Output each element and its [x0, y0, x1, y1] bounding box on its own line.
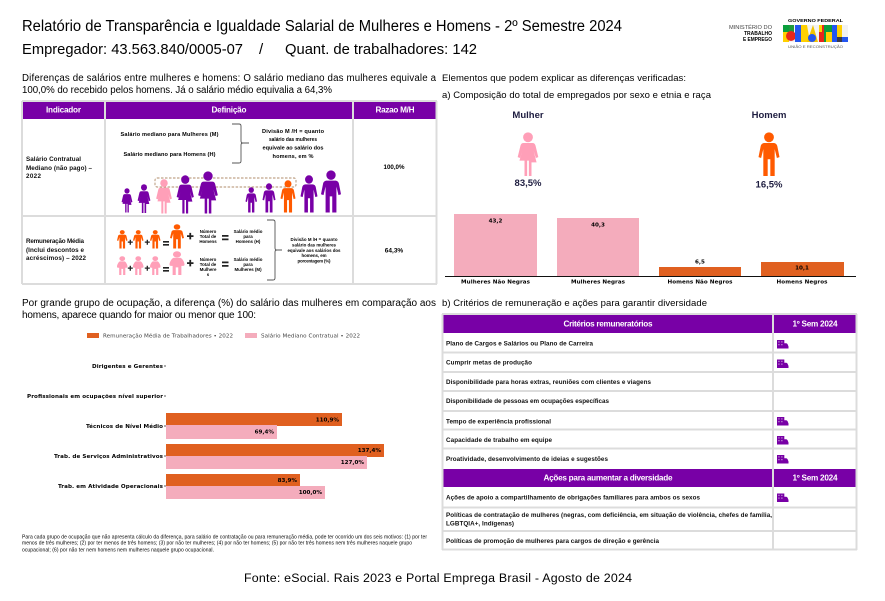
criteria rows: Disponibilidade de pessoas em ocupações específicas — [446, 398, 609, 405]
icons: criteria met — [777, 340, 788, 502]
logo: Ministério do Trabalho e Emprego — [729, 24, 772, 43]
header: diversity actions — [443, 469, 856, 487]
header: remuneration criteria — [443, 315, 856, 333]
employer line: / — [259, 41, 264, 58]
row 1 indicator: Salário Contratual — [26, 156, 81, 163]
chart: composition by sex and race: Mulheres Negras — [571, 280, 626, 286]
occupation intro text: Por grande grupo de ocupação, a diferença (%) do salário das mulheres em comparação aos — [22, 298, 436, 309]
row 2 division note: porcentagem (%) — [298, 258, 331, 264]
chart: composition by sex and race: 10,1 — [795, 266, 809, 272]
row 1 indicator — [26, 156, 92, 180]
table header: Razao M/H — [376, 106, 415, 114]
bars: Trab. de Serviços Administrativos — [166, 444, 384, 469]
criteria rows — [446, 340, 651, 463]
panel: indicators table — [22, 101, 437, 284]
category labels: Dirigentes e Gerentes — [92, 364, 164, 370]
chart: composition by sex and race: 43,2 — [489, 218, 503, 224]
panel: woman share: 83,5% — [515, 178, 542, 189]
header: diversity actions: 1º Sem 2024 — [792, 474, 838, 482]
header: diversity actions: Ações para aumentar a diversidade — [544, 474, 673, 482]
criteria rows: Disponibilidade para horas extras, reuniões com clientes e viagens — [446, 379, 651, 386]
footnote: menos de três mulheres; (2) por ter menos de três homens; (3) por não ter mulheres; (4) por não ter homens; (5) por não ter três homens nem três mulheres naquele grupo — [22, 540, 412, 546]
bars: Técnicos de Nível Médio: 110,9% — [316, 418, 339, 424]
icons: men group — [246, 170, 341, 212]
logo: Governo Federal Brasil: GOVERNO FEDERAL — [788, 18, 843, 24]
table header — [23, 102, 436, 119]
formula: women: Número — [200, 257, 217, 262]
footnote: ocupacional; (6) por não ter nem homens nem mulheres naquele grupo ocupacional. — [22, 548, 214, 554]
row 2 division note: equivale aos salários dos — [288, 248, 341, 253]
bars: Trab. em Atividade Operacionais: 83,9% — [278, 478, 297, 484]
row 1 ratio: 100,0% — [384, 164, 405, 171]
formula: men: Total de — [200, 234, 217, 239]
row 2 indicator: acréscimos) – 2022 — [26, 255, 86, 262]
chart: composition by sex and race — [445, 214, 856, 286]
panel: woman share — [512, 110, 544, 189]
row 2 indicator: Remuneração Média — [26, 238, 84, 245]
employer line: Empregador: 43.563.840/0005-07 — [22, 41, 243, 58]
bars: Trab. de Serviços Administrativos: 127,0% — [341, 460, 364, 466]
title: Relatório de Transparência e Igualdade Salarial de Mulheres e Homens - 2º Semestre 2024 — [22, 18, 622, 35]
intro text: salary differences: Diferenças de salários entre mulheres e homens: O salário mediano das mulheres equivale a — [22, 73, 437, 84]
formula: men — [117, 224, 263, 248]
intro text: salary differences: 100,0% do recebido pelos homens. Já o salário médio equivalia a 64,3% — [22, 85, 332, 96]
dashed highlight box — [155, 178, 296, 187]
criteria rows: Cumprir metas de produção — [446, 360, 532, 366]
panel: criteria table — [442, 314, 857, 550]
criteria rows: Proatividade, desenvolvimento de ideias e sugestões — [446, 456, 608, 463]
formula: women: Mulheres (M) — [234, 267, 262, 272]
criteria rows: Plano de Cargos e Salários ou Plano de Carreira — [446, 340, 593, 348]
category labels: Trab. de Serviços Administrativos — [54, 454, 164, 460]
formula: men: Número — [200, 229, 217, 234]
category labels: Profissionais em ocupações nível superior — [27, 393, 163, 400]
row 1 brace — [232, 124, 249, 163]
row 1 indicator: 2022 — [26, 173, 41, 180]
bars: Técnicos de Nível Médio: 69,4% — [255, 430, 274, 436]
panel: man share — [752, 110, 786, 190]
bars: Trab. de Serviços Administrativos: 137,4% — [358, 448, 381, 454]
category labels: Trab. em Atividade Operacionais — [58, 484, 164, 490]
section a heading: a) Composição do total de empregados por sexo e etnia e raça — [442, 90, 712, 101]
row 2 division note — [288, 237, 341, 264]
formula: women: Total de — [200, 262, 217, 267]
action rows — [446, 494, 772, 545]
chart: composition by sex and race: Homens Não Negros — [668, 280, 733, 286]
formula: men: para — [243, 234, 253, 239]
formula: men: Salário médio — [234, 229, 263, 234]
row 1 division note — [262, 129, 325, 160]
header: remuneration criteria: Critérios remuneratórios — [564, 320, 653, 328]
bars: Trab. em Atividade Operacionais — [166, 474, 325, 499]
row 2 division note: homens, em — [302, 253, 327, 258]
row 2 division note: salário das mulheres — [292, 242, 337, 248]
chart: composition by sex and race: Homens Negros — [776, 280, 828, 286]
logo: Governo Federal Brasil: UNIÃO E RECONSTRUÇÃO — [788, 44, 843, 49]
formula: men: Homens (H) — [236, 239, 261, 244]
legend — [87, 332, 360, 340]
action rows: LGBTQIA+, Indígenas) — [446, 520, 514, 528]
footnote — [22, 534, 427, 554]
formula: women: para — [243, 262, 253, 267]
criteria rows: Capacidade de trabalho em equipe — [446, 437, 552, 444]
row 1 division note: homens, em % — [272, 154, 314, 160]
logo: Ministério do Trabalho e Emprego: TRABALHO — [744, 31, 772, 37]
panel: man share: Homem — [752, 110, 786, 121]
occupation intro text: homens, aparece quando for maior ou menor que 100: — [22, 310, 256, 321]
criteria rows: Tempo de experiência profissional — [446, 418, 551, 426]
row 1 labels — [120, 132, 219, 158]
chart: composition by sex and race: 6,5 — [695, 260, 705, 266]
action rows: Políticas de contratação de mulheres (negras, com deficiência, em situação de violência, chefes de família, — [446, 512, 772, 519]
row 1 labels: Salário mediano para Mulheres (M) — [120, 132, 219, 138]
bars: Trab. em Atividade Operacionais: 100,0% — [299, 490, 322, 496]
action rows: Ações de apoio a compartilhamento de obrigações familiares para ambos os sexos — [446, 494, 700, 502]
row 2 division note: Divisão M /H = quanto — [290, 237, 338, 242]
right column heading: Elementos que podem explicar as diferenças verificadas: — [442, 73, 686, 84]
panel: woman share: Mulher — [512, 110, 544, 121]
section b heading: b) Critérios de remuneração e ações para garantir diversidade — [442, 298, 707, 309]
row 2 brace — [267, 220, 282, 280]
logo: Ministério do Trabalho e Emprego: MINISTÉRIO DO — [729, 24, 772, 31]
row 1 division note: salário das mulheres — [269, 137, 317, 143]
logo: Ministério do Trabalho e Emprego: E EMPREGO — [743, 37, 772, 43]
icons: women group — [122, 171, 218, 214]
row 1 division note: Divisão M /H = quanto — [262, 129, 325, 135]
row 2 indicator — [26, 238, 86, 262]
row 1 division note: equivale ao salário dos — [262, 146, 324, 152]
source line: Fonte: eSocial. Rais 2023 e Portal Emprega Brasil - Agosto de 2024 — [244, 571, 632, 585]
formula: women: s — [207, 272, 210, 277]
intro text: salary differences — [22, 73, 437, 96]
logo: Governo Federal Brasil — [783, 18, 848, 49]
row 1 indicator: Mediano (não pago) – — [26, 165, 92, 172]
action rows: Políticas de promoção de mulheres para cargos de direção e gerência — [446, 538, 659, 545]
bars: Técnicos de Nível Médio — [166, 413, 342, 439]
chart: occupation bars — [27, 332, 384, 499]
legend: Salário Mediano Contratual • 2022 — [261, 332, 360, 340]
formula: women: Mulhere — [200, 267, 217, 272]
row 1 labels: Salário mediano para Homens (H) — [124, 152, 216, 158]
table header: Definição — [212, 106, 246, 114]
row 2 indicator: (Inclui descontos e — [26, 247, 84, 254]
employer line: Quant. de trabalhadores: 142 — [285, 41, 477, 58]
panel: man share: 16,5% — [756, 180, 783, 190]
chart: composition by sex and race: 40,3 — [591, 222, 605, 228]
chart: composition by sex and race: Mulheres Não Negras — [461, 280, 531, 286]
row 2 ratio: 64,3% — [385, 248, 403, 254]
formula: women: Salário médio — [234, 257, 263, 262]
legend: Remuneração Média de Trabalhadores • 2022 — [103, 332, 233, 340]
employer line — [22, 41, 477, 58]
table header: Indicador — [46, 106, 82, 114]
category labels — [27, 364, 164, 490]
formula: men: Homens — [199, 239, 217, 244]
header: remuneration criteria: 1º Sem 2024 — [792, 320, 838, 328]
footnote: Para cada grupo de ocupação que não apresenta cálculo da diferença, para salário de contratação ou para remuneração média, pode ter ocorrido um dos seis motivos: (1) por ter — [22, 534, 427, 540]
formula: women — [117, 251, 263, 277]
occupation intro text — [22, 298, 436, 321]
category labels: Técnicos de Nível Médio — [86, 423, 163, 430]
